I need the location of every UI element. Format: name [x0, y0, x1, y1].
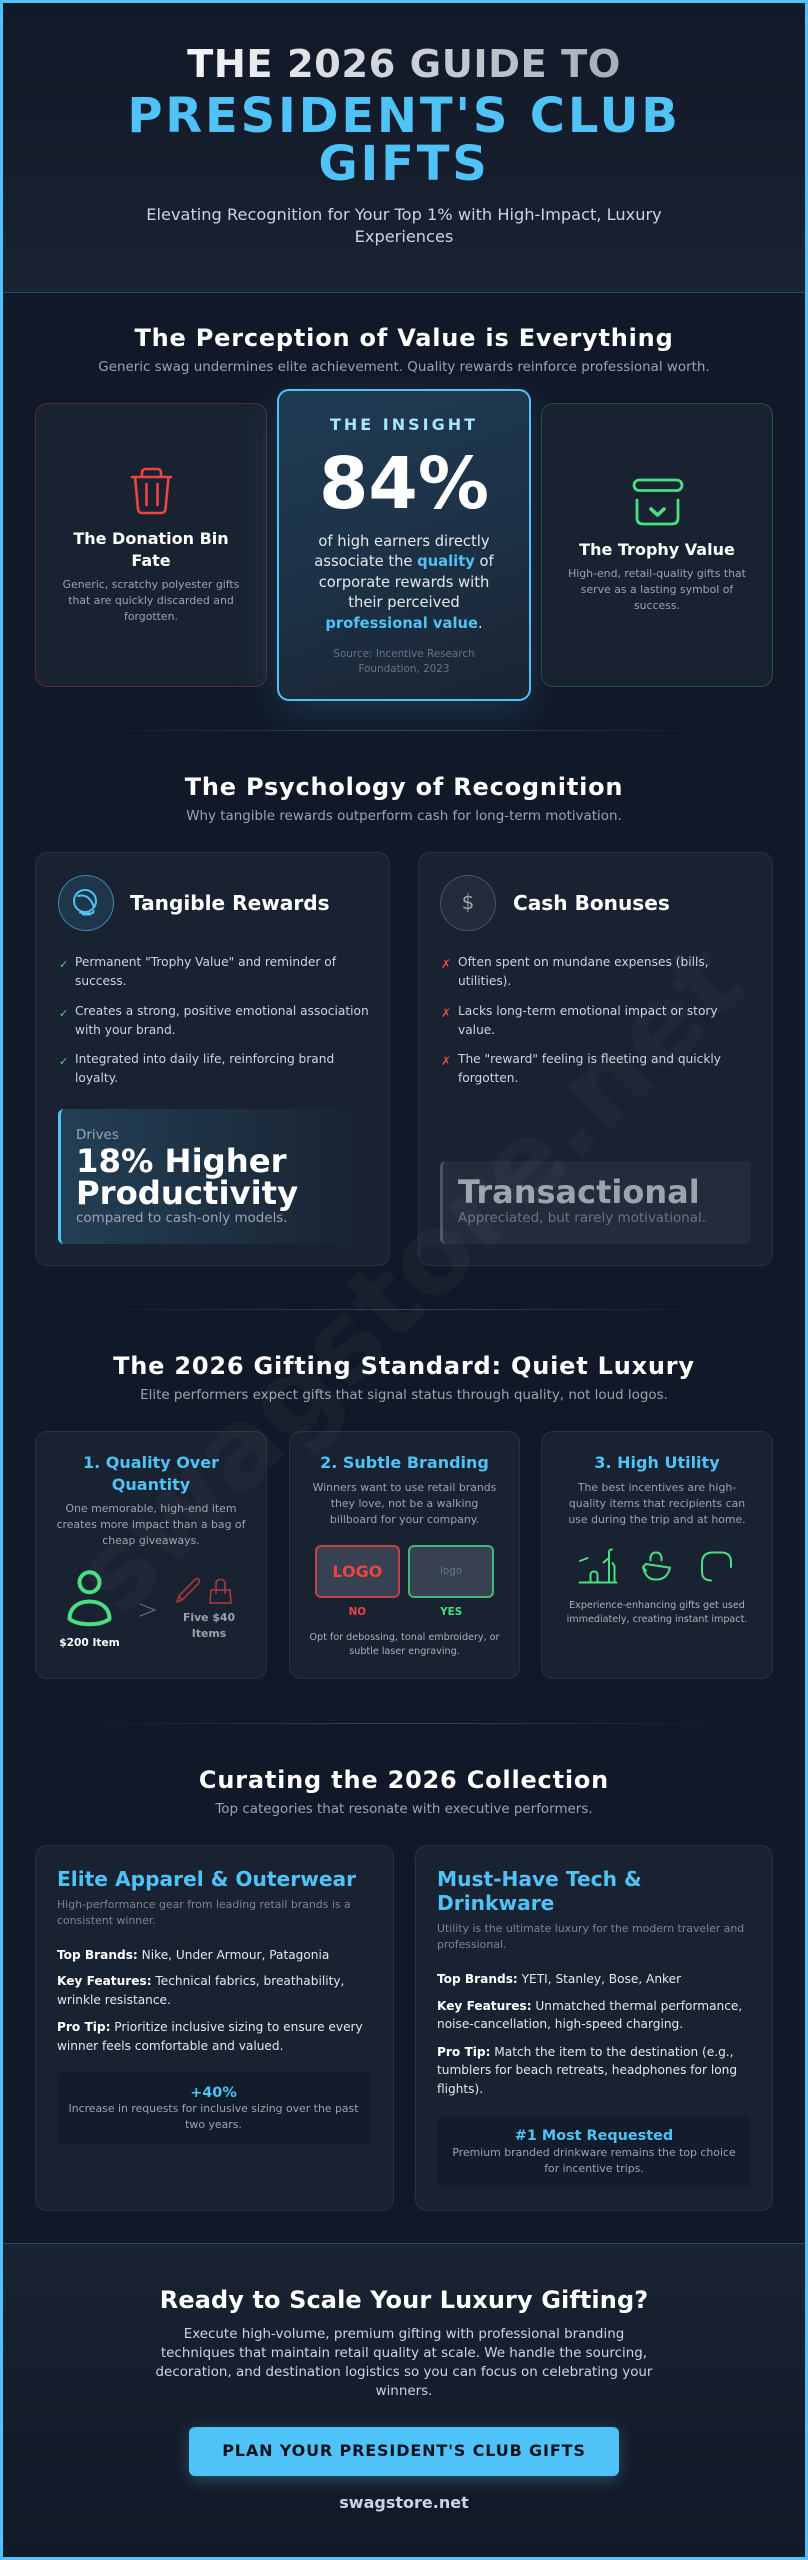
benefit list: ✓	[59, 958, 68, 971]
footer text: techniques that maintain retail quality at scale. We handle the sourcing,	[161, 2346, 647, 2361]
section subtitle: Top categories that resonate with executive performers.	[215, 1802, 593, 1817]
subtle logo box	[408, 1545, 494, 1598]
icon: pencil	[176, 1578, 200, 1603]
panel: apparel	[35, 1845, 394, 2211]
list item: Integrated into daily life, reinforcing brand	[75, 1052, 334, 1066]
list item: Lacks long-term emotional impact or story	[458, 1004, 718, 1018]
loud logo box: LOGO	[332, 1562, 382, 1581]
card description: The best incentives are high-	[578, 1481, 736, 1494]
card description: billboard for your company.	[330, 1513, 479, 1526]
title highlight: PRESIDENT'S CLUB	[127, 88, 681, 144]
stat callout	[437, 2116, 751, 2187]
logo comparison: yes	[408, 1545, 494, 1618]
subtle logo box: logo	[440, 1565, 462, 1577]
source	[333, 648, 475, 674]
list item: value.	[458, 1023, 495, 1037]
subtitle: Elevating Recognition for Your Top 1% with High-Impact, Luxury	[146, 205, 662, 224]
insight text: their perceived	[348, 594, 460, 611]
yes label: YES	[440, 1606, 462, 1618]
list item	[441, 1052, 721, 1085]
panel title: Tangible Rewards	[130, 890, 330, 914]
list item	[59, 1004, 369, 1037]
card title	[73, 529, 229, 570]
list item: utilities).	[458, 974, 511, 988]
drawback list	[441, 955, 721, 1085]
drawback list: ✗	[441, 1006, 451, 1020]
section subtitle: Generic swag undermines elite achievement. Quality rewards reinforce professional worth.	[98, 360, 710, 374]
drawback list: ✗	[441, 957, 451, 971]
top brands: Top Brands: Nike, Under Armour, Patagonia	[57, 1948, 329, 1962]
stat value: +40%	[190, 2085, 237, 2101]
pro tip: winner feels comfortable and valued.	[57, 2039, 283, 2053]
label: item: $200 Item	[59, 1637, 120, 1649]
heading: The 2026 Gifting Standard: Quiet Luxury	[113, 1352, 695, 1380]
category title: Must-Have Tech &	[437, 1867, 642, 1891]
card description: use during the trip and at home.	[568, 1513, 746, 1526]
icon: archive box	[632, 478, 684, 526]
benefit list: ✓	[59, 1006, 68, 1020]
arrow: greater than	[140, 1603, 156, 1617]
key features	[57, 1972, 344, 2010]
icon: dollar circle	[440, 874, 496, 930]
stat value	[76, 1142, 298, 1212]
header	[0, 0, 808, 293]
section: the collection	[35, 1766, 773, 2211]
heading: The Psychology of Recognition	[185, 772, 623, 800]
card description	[57, 1502, 246, 1547]
pro tip: tumblers for beach retreats, headphones for long	[437, 2063, 737, 2077]
source: Source: Incentive Research	[333, 648, 475, 660]
pro tip: Pro Tip: Match the item to the destination (e.g.,	[437, 2045, 734, 2059]
card title: The Donation Bin	[73, 529, 229, 548]
list item	[59, 1052, 334, 1085]
footer heading: Ready to Scale Your Luxury Gifting?	[160, 2286, 648, 2314]
list item: Often spent on mundane expenses (bills,	[458, 955, 709, 969]
drawback list: ✗	[441, 1054, 451, 1068]
footer text: winners.	[376, 2384, 432, 2399]
category description: High-performance gear from leading retail brands is a	[57, 1898, 351, 1911]
key features: wrinkle resistance.	[57, 1993, 171, 2007]
stat note: Increase in requests for inclusive sizing over the past	[68, 2102, 358, 2115]
panel: donation bin	[35, 403, 267, 687]
key features	[437, 1997, 742, 2034]
list item	[441, 955, 709, 988]
icon: person	[68, 1570, 112, 1626]
card description: that are quickly discarded and	[68, 594, 234, 607]
stat lead: Drives	[76, 1128, 119, 1142]
key features: Key Features: Technical fabrics, breathability,	[57, 1974, 344, 1988]
icon: medal circle	[58, 874, 114, 930]
icon: golf and buildings	[578, 1548, 618, 1584]
list item: loyalty.	[75, 1071, 118, 1085]
card description	[568, 1481, 746, 1526]
stat note	[437, 2145, 751, 2177]
category title	[437, 1867, 642, 1915]
watermark: swagstore.net	[48, 918, 768, 1638]
button: PLAN YOUR PRESIDENT'S CLUB GIFTS	[222, 2441, 586, 2460]
category title: Elite Apparel & Outerwear	[57, 1867, 356, 1891]
card title	[83, 1453, 219, 1494]
card description: quality items that recipients can	[569, 1497, 745, 1510]
icon: trash can	[130, 468, 172, 514]
list item: Creates a strong, positive emotional association	[75, 1004, 369, 1018]
section: quiet luxury	[35, 1352, 773, 1679]
insight text: corporate rewards with	[319, 574, 489, 591]
pro tip	[437, 2043, 737, 2099]
label: THE INSIGHT	[330, 415, 478, 434]
insight text: professional value.	[325, 615, 483, 632]
pro tip	[57, 2018, 363, 2056]
card title: 2. Subtle Branding	[320, 1453, 489, 1472]
panel: quality over quantity	[35, 1431, 267, 1679]
card description: cheap giveaways.	[102, 1534, 200, 1547]
icon: dollar circle: $	[462, 890, 474, 914]
category title: Drinkware	[437, 1891, 554, 1915]
title line one	[0, 42, 808, 88]
category description: Utility is the ultimate luxury for the modern traveler and	[437, 1922, 744, 1935]
card description: Winners want to use retail brands	[313, 1481, 496, 1494]
panel: trophy value	[541, 403, 773, 687]
stat callout: transactional	[440, 1161, 751, 1244]
card title: Fate	[131, 551, 171, 570]
button	[189, 2427, 619, 2476]
brand: swagstore.net	[339, 2493, 469, 2512]
note: Experience-enhancing gifts get used	[569, 1600, 745, 1611]
card description: serve as a lasting symbol of	[581, 583, 733, 596]
section: perception of value	[35, 324, 773, 725]
note: Opt for debossing, tonal embroidery, or	[309, 1632, 500, 1643]
icon: rounded frame	[701, 1552, 732, 1582]
category description	[57, 1898, 351, 1927]
stat note: compared to cash-only models.	[76, 1211, 288, 1226]
note	[309, 1632, 500, 1656]
stat callout	[57, 2072, 370, 2145]
category description	[437, 1921, 744, 1953]
icon: bag tag	[642, 1552, 671, 1580]
card description	[568, 567, 746, 612]
card title: The Trophy Value	[579, 540, 735, 559]
insight text: associate the quality of	[314, 553, 494, 570]
list item	[441, 1004, 718, 1037]
label: items: Items	[192, 1627, 226, 1640]
stat value: Productivity	[76, 1174, 298, 1212]
insight text	[314, 533, 494, 632]
card description: creates more impact than a bag of	[57, 1518, 245, 1531]
loud logo box	[315, 1545, 400, 1598]
list item	[59, 955, 336, 988]
note: immediately, creating instant impact.	[567, 1614, 747, 1624]
title highlight: GIFTS	[318, 136, 490, 192]
heading: Curating the 2026 Collection	[199, 1766, 609, 1794]
source: Foundation, 2023	[358, 662, 450, 674]
stat value: 18% Higher	[76, 1142, 287, 1180]
label: items: Five $40	[183, 1611, 235, 1624]
category description: professional.	[437, 1938, 506, 1951]
benefit list	[59, 955, 369, 1085]
top brands: Top Brands: YETI, Stanley, Bose, Anker	[437, 1972, 681, 1986]
key features: Key Features: Unmatched thermal performance,	[437, 1999, 742, 2013]
card description	[63, 578, 239, 623]
card description	[313, 1481, 496, 1526]
list item: Permanent "Trophy Value" and reminder of	[75, 955, 336, 969]
panel: high utility	[541, 1431, 773, 1679]
note: subtle laser engraving.	[349, 1646, 460, 1656]
card description: Generic, scratchy polyester gifts	[63, 578, 239, 591]
label: items	[183, 1611, 235, 1640]
list item: forgotten.	[458, 1071, 518, 1085]
list item: The "reward" feeling is fleeting and quickly	[458, 1052, 721, 1066]
pro tip: flights).	[437, 2082, 483, 2096]
card title: 3. High Utility	[594, 1453, 720, 1472]
stat value: #1 Most Requested	[515, 2128, 673, 2144]
panel: the insight	[277, 389, 531, 701]
category description: consistent winner.	[57, 1914, 156, 1927]
stat note: two years.	[185, 2118, 242, 2131]
section subtitle: Elite performers expect gifts that signal status through quality, not loud logos.	[140, 1388, 668, 1402]
title line one: THE 2026 GUIDE TO	[187, 42, 621, 87]
stat note: Appreciated, but rarely motivational.	[458, 1211, 706, 1226]
card description: One memorable, high-end item	[66, 1502, 236, 1515]
heading: The Perception of Value is Everything	[134, 324, 674, 352]
pro tip: Pro Tip: Prioritize inclusive sizing to ensure every	[57, 2020, 363, 2034]
benefit list: ✓	[59, 1055, 68, 1068]
panel title: Cash Bonuses	[513, 890, 670, 914]
stat value: Transactional	[458, 1173, 700, 1211]
big number: 84%	[319, 442, 489, 524]
section subtitle: Why tangible rewards outperform cash for long-term motivation.	[186, 809, 622, 824]
card description: they love, not be a walking	[331, 1497, 478, 1510]
footer text	[0, 2326, 808, 2401]
footer text: Execute high-volume, premium gifting with professional branding	[184, 2327, 624, 2342]
list item: success.	[75, 974, 127, 988]
no label: NO	[349, 1606, 366, 1618]
title highlight	[127, 88, 681, 192]
panel: tangible rewards	[35, 852, 390, 1266]
key features: noise-cancellation, high-speed charging.	[437, 2017, 683, 2031]
subtitle: Experiences	[355, 227, 453, 246]
panel: tech and drinkware	[415, 1845, 773, 2211]
card title: Quantity	[112, 1475, 190, 1494]
icon: shopping bag	[209, 1578, 232, 1604]
panel: subtle branding	[289, 1431, 520, 1679]
stat callout: productivity	[58, 1109, 368, 1244]
panel: cash bonuses	[418, 852, 773, 1266]
subtitle	[146, 205, 662, 246]
card description: forgotten.	[124, 610, 178, 623]
comparison graphic	[59, 1570, 235, 1649]
section: psychology of recognition	[35, 772, 773, 1266]
footer call to action	[0, 2243, 808, 2560]
card description: High-end, retail-quality gifts that	[568, 567, 746, 580]
card description: success.	[634, 599, 680, 612]
stat note: Premium branded drinkware remains the top choice	[452, 2146, 736, 2159]
footer text: decoration, and destination logistics so you can focus on celebrating your	[156, 2365, 652, 2380]
stat note: for incentive trips.	[544, 2162, 644, 2175]
list item: with your brand.	[75, 1023, 176, 1037]
stat note	[57, 2101, 370, 2134]
note	[567, 1600, 747, 1624]
insight text: of high earners directly	[318, 533, 490, 550]
logo comparison: no	[315, 1545, 400, 1618]
card title: 1. Quality Over	[83, 1453, 219, 1472]
